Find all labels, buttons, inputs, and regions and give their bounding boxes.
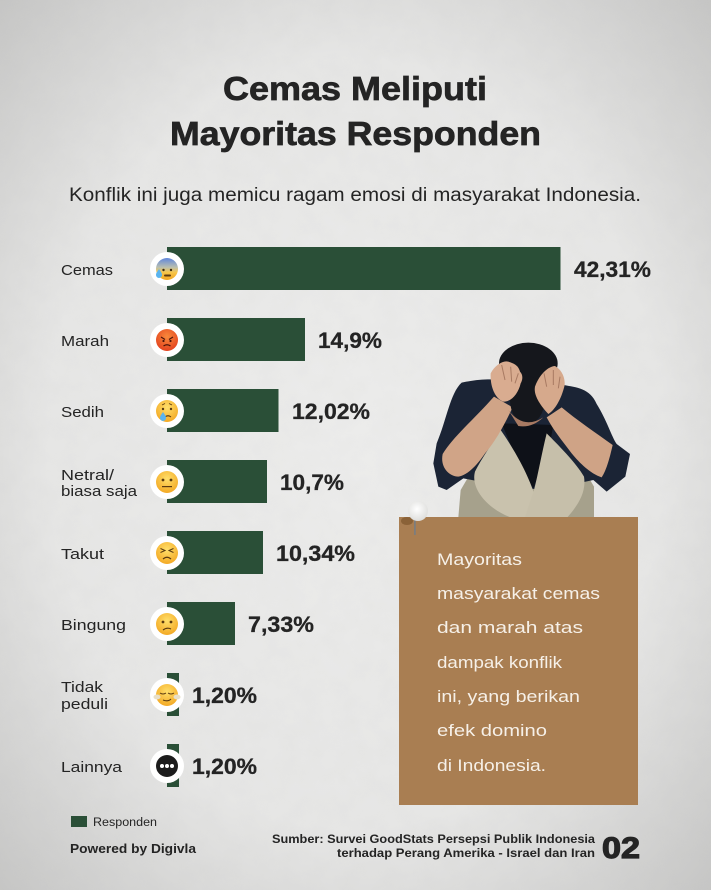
- row: Netral / biasa saja: Netral/: [61, 467, 115, 484]
- row: Netral / biasa saja: biasa saja: [61, 483, 138, 500]
- row: Lainnya: 1,20%: [192, 754, 257, 779]
- row: Takut: Takut: [61, 546, 105, 563]
- subtitle: Konflik ini juga memicu ragam emosi di masyarakat Indonesia.: [69, 185, 641, 206]
- row: Marah: 14,9%: [318, 328, 382, 353]
- row: Bingung: 7,33%: [248, 612, 314, 637]
- callout panel: dan marah atas: [437, 619, 583, 637]
- row: Lainnya: Lainnya: [61, 759, 123, 776]
- callout panel: masyarakat cemas: [437, 585, 600, 603]
- row: Tidak peduli: Tidak: [61, 679, 104, 696]
- row: Cemas: 42,31%: [574, 257, 651, 282]
- row: Tidak peduli: 1,20%: [192, 683, 257, 708]
- legend: [71, 816, 157, 829]
- title: Cemas Meliputi: [223, 70, 487, 107]
- source note: terhadap Perang Amerika - Israel dan Iran: [337, 846, 595, 860]
- row: Bingung: [61, 602, 314, 645]
- row: Tidak peduli: peduli: [61, 696, 108, 713]
- row: Cemas: Cemas: [61, 262, 113, 279]
- callout panel: ini, yang berikan: [437, 688, 580, 706]
- title: [170, 70, 541, 152]
- row: Lainnya: [61, 744, 257, 787]
- row: Sedih: Sedih: [61, 404, 104, 421]
- callout panel: efek domino: [437, 722, 547, 740]
- title: Mayoritas Responden: [170, 115, 541, 152]
- row: Cemas: [61, 247, 651, 290]
- row: Netral / biasa saja: [61, 460, 344, 503]
- row: Takut: [61, 531, 355, 574]
- row: Netral / biasa saja: 10,7%: [280, 470, 344, 495]
- row: Sedih: 12,02%: [292, 399, 370, 424]
- callout panel: dampak konflik: [437, 654, 563, 672]
- callout panel: [399, 517, 638, 805]
- row: Takut: 10,34%: [276, 541, 355, 566]
- photo: anxious man holding head: [433, 343, 630, 517]
- page number: 02: [602, 832, 640, 865]
- row: Bingung: Bingung: [61, 617, 126, 634]
- callout panel: Mayoritas: [437, 551, 522, 569]
- row: Tidak peduli: [61, 673, 257, 716]
- icon: push pin: [401, 501, 428, 535]
- row: Marah: Marah: [61, 333, 109, 350]
- powered by: Powered by Digivla: [70, 841, 197, 856]
- bar chart: emotions: [61, 247, 651, 787]
- row: Marah: [61, 318, 382, 361]
- row: Sedih: [61, 389, 370, 432]
- source note: Sumber: Survei GoodStats Persepsi Publik Indonesia: [272, 832, 595, 846]
- source note: [272, 832, 595, 860]
- legend: Responden: [93, 817, 157, 829]
- callout panel: di Indonesia.: [437, 757, 546, 775]
